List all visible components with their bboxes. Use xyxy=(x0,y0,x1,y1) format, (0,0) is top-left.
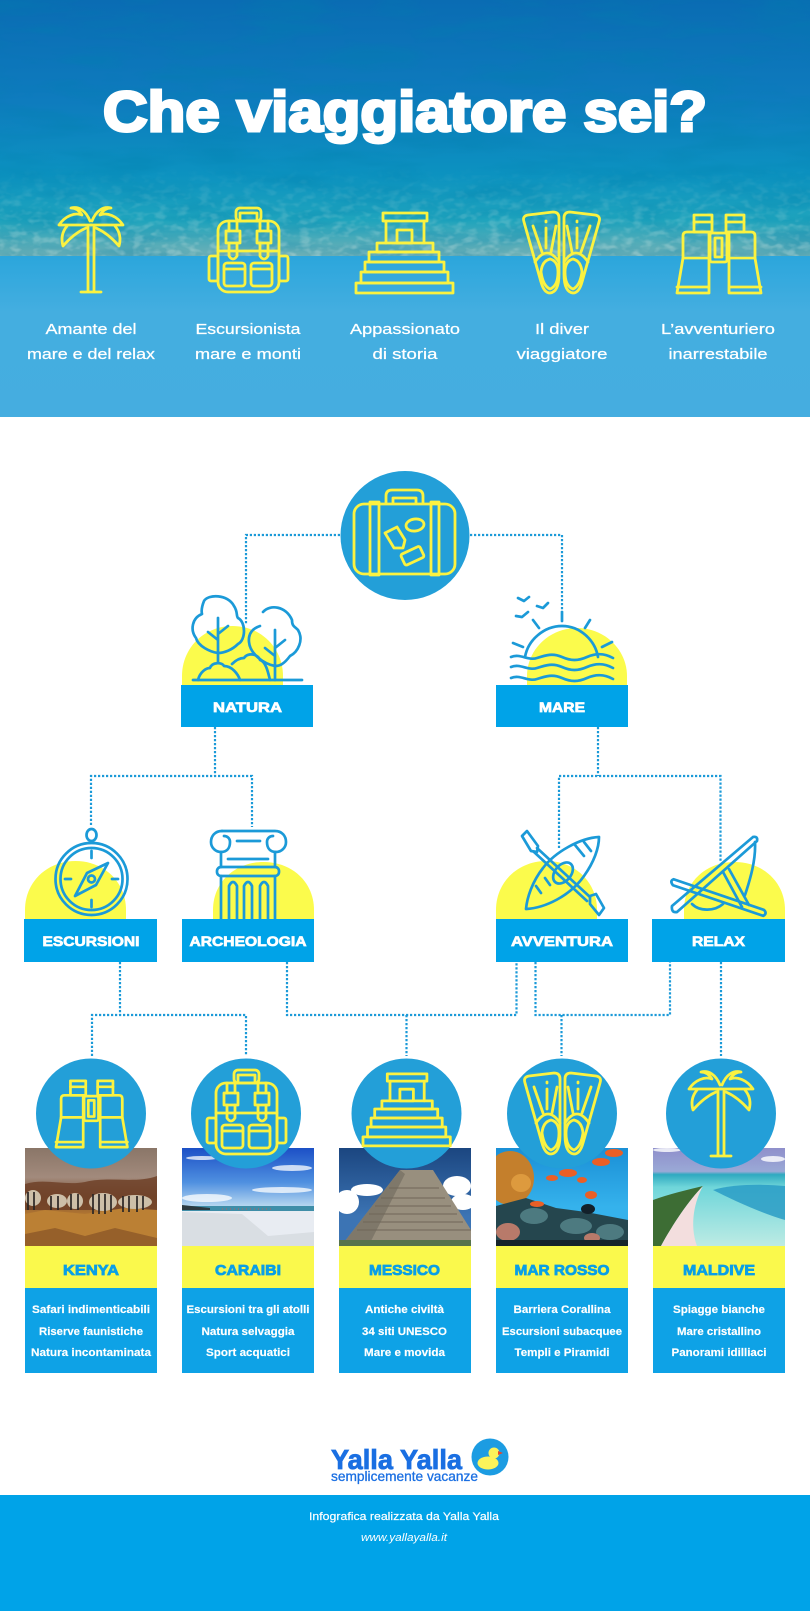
photo: zebras in savannah xyxy=(25,1148,157,1246)
caption: adventurer: inarrestabile xyxy=(668,346,768,363)
caption: history lover: di storia xyxy=(372,346,438,363)
features panel: Barriera Corallina xyxy=(514,1304,611,1316)
yellow dome xyxy=(496,861,597,919)
features panel: Sport acquatici xyxy=(206,1347,290,1359)
features panel: Antiche civiltà xyxy=(365,1304,445,1316)
icon: compass xyxy=(56,829,128,915)
name band xyxy=(496,1246,628,1288)
caption: history lover: Appassionato xyxy=(350,321,460,338)
caption: sea and relax: mare e del relax xyxy=(27,346,156,363)
destination name: KENYA xyxy=(63,1262,119,1279)
dotted connectors of the flow chart xyxy=(91,535,721,1056)
category: NATURA xyxy=(181,596,313,727)
yellow dome xyxy=(684,862,785,919)
photo: Maya pyramid xyxy=(339,1148,471,1246)
destination badge: binoculars xyxy=(36,1058,146,1168)
traveller type: adventurer xyxy=(661,215,775,363)
photo: atoll aerial view xyxy=(653,1148,785,1246)
destination card: CARAIBI xyxy=(182,1148,314,1373)
features panel: Mare e movida xyxy=(364,1347,446,1359)
features panel xyxy=(339,1288,471,1373)
category: ARCHEOLOGIA xyxy=(182,831,314,962)
destination badge: fins xyxy=(507,1058,617,1168)
destination card: KENYA xyxy=(25,1148,157,1373)
logo: Yalla Yalla: Yalla Yalla xyxy=(331,1444,462,1475)
features panel xyxy=(25,1288,157,1373)
features panel: Escursioni tra gli atolli xyxy=(186,1304,310,1316)
label: RELAX xyxy=(692,934,745,949)
destination badge: palm xyxy=(666,1058,776,1168)
label box xyxy=(496,685,628,727)
label box xyxy=(652,919,785,962)
destination badge: temple xyxy=(352,1058,462,1168)
caption: adventurer: L’avventuriero xyxy=(661,321,775,338)
label: AVVENTURA xyxy=(511,934,613,949)
features panel: Natura selvaggia xyxy=(202,1326,295,1338)
footer website: www.yallayalla.it xyxy=(361,1532,448,1544)
label box xyxy=(181,685,313,727)
icon: binoculars xyxy=(677,215,761,293)
features panel: Mare cristallino xyxy=(677,1326,761,1338)
traveller type: diver xyxy=(516,212,608,363)
features panel xyxy=(496,1288,628,1373)
label box xyxy=(24,919,157,962)
traveller type: sea and relax xyxy=(27,208,156,363)
label box xyxy=(496,919,628,962)
root node: suitcase xyxy=(340,471,470,600)
features panel xyxy=(182,1288,314,1373)
caption: diver: Il diver xyxy=(535,321,589,338)
icon: ionic column xyxy=(211,831,286,919)
traveller type: history lover xyxy=(350,213,460,363)
caption: hiker: Escursionista xyxy=(196,321,301,338)
footer panel xyxy=(0,1495,810,1611)
yellow dome xyxy=(527,628,627,685)
label: NATURA xyxy=(213,700,282,715)
features panel: 34 siti UNESCO xyxy=(362,1326,447,1338)
header panel: sea and beach background xyxy=(0,0,810,417)
title: Che viaggiatore sei? xyxy=(103,80,707,144)
icon: trees xyxy=(193,596,302,680)
features panel: Riserve faunistiche xyxy=(39,1326,143,1338)
destination name: MESSICO xyxy=(369,1262,440,1279)
features panel: Escursioni subacquee xyxy=(502,1326,622,1338)
yellow dome xyxy=(25,861,126,919)
features panel: Spiagge bianche xyxy=(673,1304,765,1316)
destination card: MESSICO xyxy=(335,1148,475,1373)
name band xyxy=(339,1246,471,1288)
destination card: MAR ROSSO xyxy=(486,1148,628,1373)
caption: diver: viaggiatore xyxy=(516,346,608,363)
features panel: Panorami idilliaci xyxy=(672,1347,766,1359)
icon: palm tree xyxy=(59,208,123,292)
traveller type: hiker xyxy=(195,208,301,363)
features panel: Safari indimenticabili xyxy=(32,1304,150,1316)
icon: kayak and paddle xyxy=(522,831,604,915)
features panel: Templi e Piramidi xyxy=(514,1347,610,1359)
icon: stepped temple xyxy=(356,213,453,293)
category: RELAX xyxy=(652,837,785,962)
destination name: CARAIBI xyxy=(215,1262,281,1279)
destination card: MALDIVE xyxy=(653,1148,785,1373)
category: AVVENTURA xyxy=(496,831,628,962)
icon: deck chair xyxy=(669,837,768,916)
name band xyxy=(653,1246,785,1288)
label: MARE xyxy=(539,700,585,715)
destination name: MALDIVE xyxy=(683,1262,755,1279)
label box xyxy=(182,919,314,962)
name band xyxy=(182,1246,314,1288)
icon: sun, sea and birds xyxy=(511,597,613,681)
logo: Yalla Yalla: semplicemente vacanze xyxy=(331,1468,478,1484)
caption: sea and relax: Amante del xyxy=(46,321,136,338)
logo: Yalla Yalla xyxy=(331,1438,508,1484)
icon: rubber duck xyxy=(472,1438,508,1476)
yellow dome xyxy=(182,626,283,685)
destination name: MAR ROSSO xyxy=(514,1262,610,1279)
label: ESCURSIONI xyxy=(42,934,140,949)
photo: white beach xyxy=(182,1148,314,1246)
icon: suitcase xyxy=(354,490,455,575)
footer credit: Infografica realizzata da Yalla Yalla xyxy=(309,1511,500,1523)
icon: diving fins xyxy=(524,212,600,293)
destination badge: backpack xyxy=(191,1058,301,1168)
features panel: Natura incontaminata xyxy=(31,1347,152,1359)
label: ARCHEOLOGIA xyxy=(190,934,307,949)
category: MARE xyxy=(496,597,628,727)
photo: coral reef xyxy=(496,1148,628,1246)
name band xyxy=(25,1246,157,1288)
yellow dome xyxy=(213,862,314,919)
caption: hiker: mare e monti xyxy=(195,346,301,363)
category: ESCURSIONI xyxy=(24,829,157,962)
features panel xyxy=(653,1288,785,1373)
icon: backpack xyxy=(209,208,288,292)
